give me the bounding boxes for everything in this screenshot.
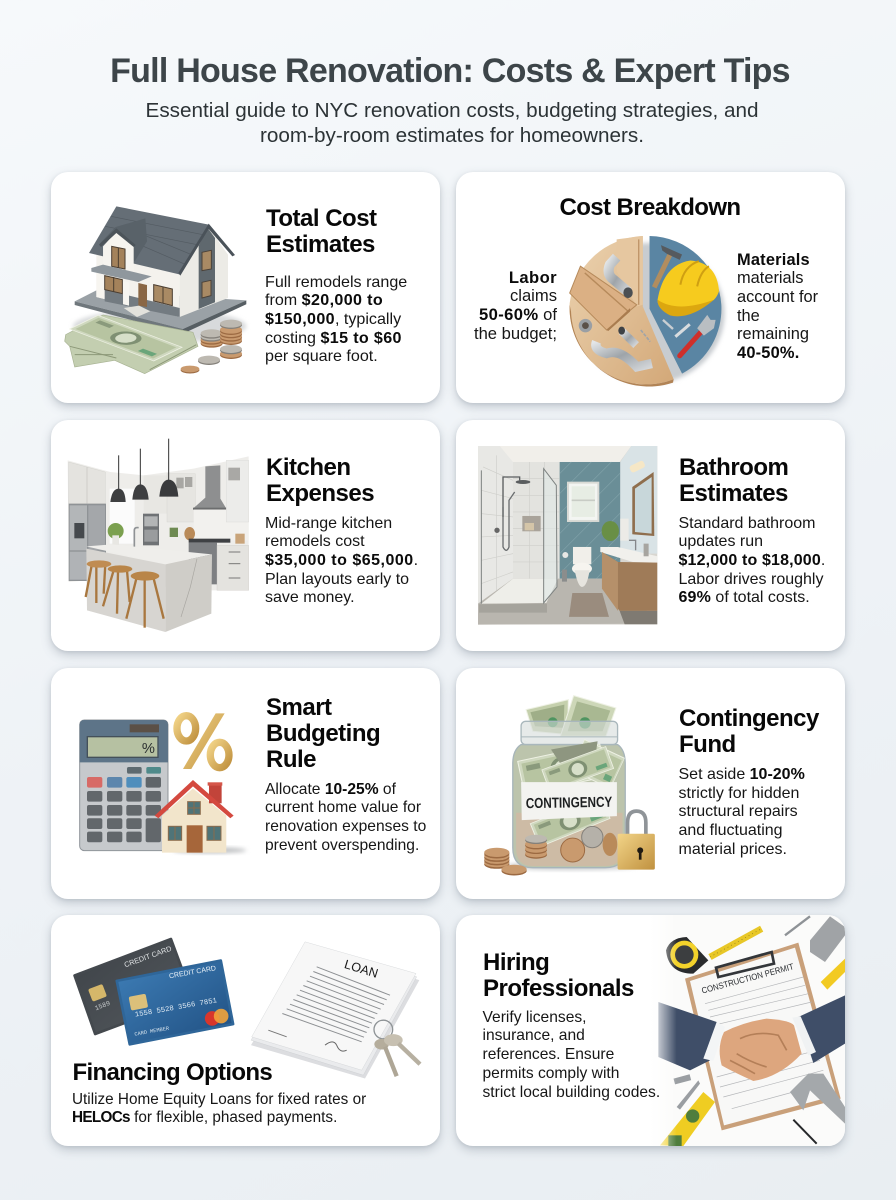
panel: cost breakdown: [456, 172, 845, 403]
labor text: Labor: [509, 268, 557, 286]
body text: strictly for hidden: [678, 785, 799, 802]
heading: [483, 949, 634, 1002]
body text: [265, 780, 426, 854]
body text: costing $15 to $60: [265, 329, 402, 347]
materials text: remaining: [737, 325, 809, 343]
body text: Standard bathroom: [678, 514, 815, 532]
subtitle: [146, 99, 758, 147]
heading: Estimates: [266, 231, 375, 258]
heading: Contingency: [679, 704, 819, 732]
materials text: [737, 250, 818, 362]
body text: Utilize Home Equity Loans for fixed rates or: [72, 1090, 366, 1108]
illustration: loan document and keys: LOAN: [343, 957, 380, 981]
body text: [482, 1009, 660, 1100]
body text: [72, 1090, 366, 1126]
body text: [678, 514, 825, 606]
labor text: 50-60% of: [479, 305, 557, 324]
panel: hiring professionals: [456, 915, 845, 1146]
illustration: loan document and keys: [251, 942, 422, 1078]
illustration: credit cards: 1589: [93, 999, 111, 1012]
subtitle: Essential guide to NYC renovation costs, budgeting strategies, and: [146, 99, 758, 122]
heading: Smart: [266, 694, 332, 720]
illustration: clipboard permit, handshake and tools: [658, 915, 845, 1146]
pie illustration: labor and materials: [569, 236, 727, 386]
heading: Kitchen: [266, 454, 351, 480]
illustration: calculator, percent and house: %: [142, 741, 155, 757]
heading: Hiring: [483, 949, 549, 976]
panel: contingency fund: [456, 668, 845, 898]
illustration: bathroom: [478, 446, 658, 625]
materials text: Materials: [737, 250, 810, 268]
materials text: 40-50%.: [737, 344, 799, 362]
body text: Plan layouts early to: [265, 571, 409, 588]
labor text: [474, 268, 557, 343]
body text: remodels cost: [265, 533, 365, 550]
body text: save money.: [265, 589, 355, 606]
body text: updates run: [678, 533, 763, 550]
body text: $12,000 to $18,000.: [678, 552, 825, 569]
body text: per square foot.: [265, 347, 378, 365]
body text: Labor drives roughly: [678, 571, 823, 588]
body text: [265, 272, 407, 365]
heading: [679, 704, 820, 758]
illustration: house with money and coins: [64, 206, 248, 374]
materials text: materials: [737, 269, 804, 287]
illustration: credit cards: CARD MEMBER: [134, 1025, 170, 1037]
illustration: calculator, percent and house: [79, 712, 246, 856]
materials text: account for: [737, 288, 818, 306]
materials text: the: [737, 307, 760, 325]
title: Full House Renovation: Costs & Expert Tips: [110, 52, 790, 90]
illustration: kitchen: [68, 438, 249, 632]
illustration: jar of money, coins and padlock: CONTINGENCY: [526, 794, 613, 812]
body text: [678, 766, 805, 858]
panel: smart budgeting rule: [51, 668, 440, 898]
heading: Bathroom: [679, 454, 788, 480]
illustration: credit cards: CREDIT CARD: [168, 965, 216, 980]
heading: Professionals: [483, 975, 634, 1002]
body text: insurance, and: [482, 1027, 585, 1044]
heading: Budgeting: [266, 720, 380, 747]
body text: material prices.: [678, 841, 787, 858]
heading: Estimates: [679, 480, 788, 507]
body text: renovation expenses to: [265, 818, 426, 835]
illustration: credit cards: [73, 938, 234, 1046]
body text: Verify licenses,: [482, 1009, 587, 1026]
heading: Financing Options: [72, 1059, 272, 1086]
body text: HELOCs for flexible, phased payments.: [72, 1109, 337, 1126]
heading: [266, 694, 380, 773]
illustration: credit cards: 1558 5528 3566 7851: [134, 997, 218, 1019]
body text: Mid-range kitchen: [265, 514, 392, 532]
labor text: claims: [510, 286, 557, 305]
body text: strict local building codes.: [482, 1084, 660, 1100]
subtitle: room-by-room estimates for homeowners.: [260, 124, 644, 147]
body text: structural repairs: [678, 803, 798, 820]
body text: permits comply with: [482, 1065, 619, 1082]
body text: and fluctuating: [678, 822, 783, 839]
panel: kitchen expenses: [51, 420, 440, 650]
body text: Allocate 10-25% of: [265, 780, 396, 798]
body text: current home value for: [265, 799, 421, 816]
labor text: the budget;: [474, 324, 557, 343]
heading: Total Cost: [266, 205, 377, 232]
heading: Rule: [266, 746, 316, 773]
illustration: jar of money, coins and padlock: [484, 695, 655, 876]
body text: prevent overspending.: [265, 837, 419, 854]
heading: Fund: [679, 731, 736, 758]
heading: [266, 205, 377, 258]
heading: [679, 454, 788, 507]
heading: Cost Breakdown: [560, 194, 740, 221]
panel: bathroom estimates: [456, 420, 845, 650]
body text: $150,000, typically: [265, 310, 401, 328]
body text: 69% of total costs.: [678, 589, 810, 606]
body text: [265, 514, 418, 606]
body text: Full remodels range: [265, 272, 407, 290]
heading: Expenses: [266, 480, 374, 507]
body text: Set aside 10-20%: [678, 766, 805, 783]
body text: from $20,000 to: [265, 291, 383, 309]
panel: total cost estimates: [51, 172, 440, 403]
illustration: credit cards: CREDIT CARD: [123, 944, 172, 969]
panel: financing options: [51, 915, 440, 1146]
body text: $35,000 to $65,000.: [265, 552, 418, 569]
body text: references. Ensure: [482, 1046, 614, 1063]
illustration: clipboard permit, handshake and tools: CONSTRUCTION PERMIT: [700, 961, 795, 996]
heading: [266, 454, 374, 507]
